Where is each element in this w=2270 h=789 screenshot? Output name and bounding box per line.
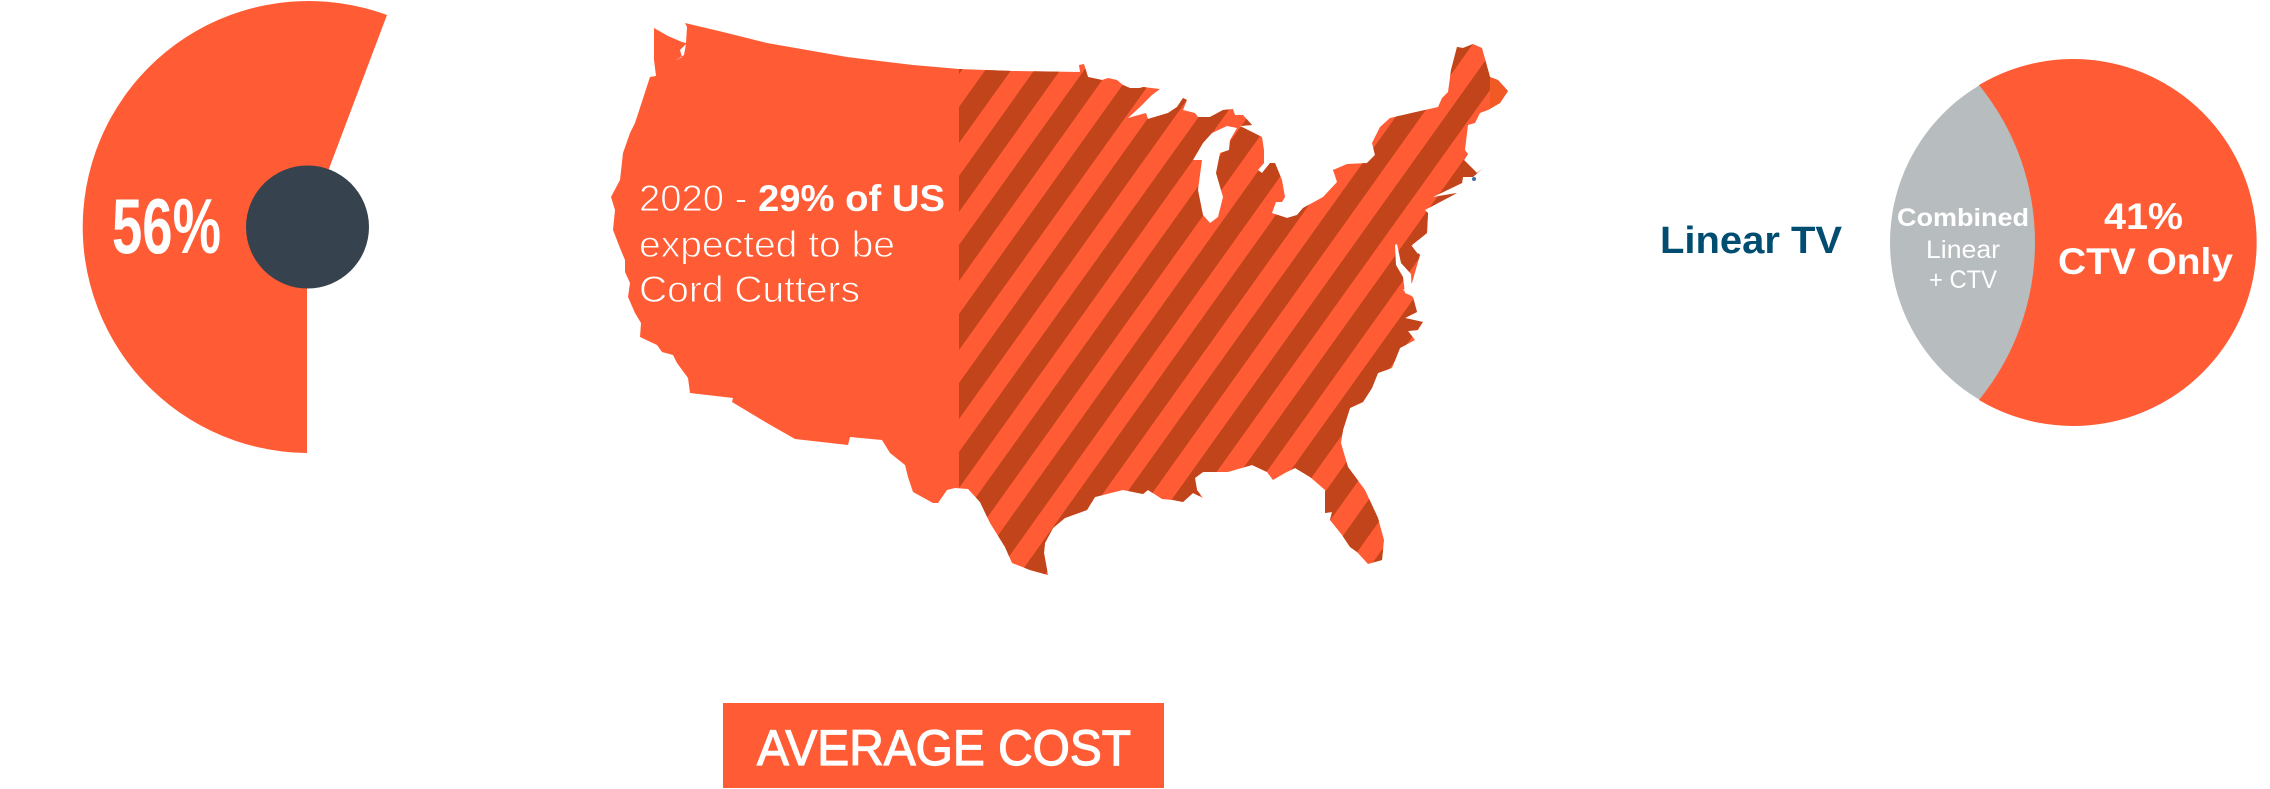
combined label — [1897, 204, 2029, 294]
CTV only label: 41% — [2104, 196, 2183, 237]
map silhouette — [600, 10, 1520, 600]
CTV only label: CTV Only — [2058, 241, 2233, 282]
venn chart: linear TV vs CTV — [1660, 59, 2257, 426]
combined circle base — [1890, 60, 2256, 426]
pie value label: 56% — [112, 182, 221, 270]
combined label: Linear — [1926, 236, 2000, 264]
banner background — [723, 703, 1164, 788]
banner text: AVERAGE COST — [757, 720, 1131, 776]
lake michigan — [1193, 126, 1237, 223]
map text: cord cutters: 2020 - 29% of US — [639, 178, 945, 219]
puget sound — [675, 44, 686, 61]
small island dot — [1472, 177, 1476, 181]
map text: cord cutters — [639, 178, 945, 310]
map text: cord cutters: Cord Cutters — [639, 269, 860, 310]
map text: cord cutters: expected to be — [639, 224, 895, 265]
chesapeake bay — [1395, 244, 1412, 296]
US map with cord cutter stripes — [600, 10, 1520, 600]
pie chart: 56% — [83, 1, 387, 453]
combined label: + CTV — [1929, 266, 1997, 294]
CTV only shape — [1979, 59, 2257, 426]
label: Linear TV: Linear TV — [1660, 220, 1843, 262]
combined label: Combined — [1897, 204, 2029, 232]
pie wedge — [83, 1, 387, 453]
pie centre circle — [246, 166, 369, 288]
banner: average cost — [723, 703, 1164, 788]
CTV only label — [2058, 196, 2233, 282]
delaware bay — [1411, 245, 1420, 254]
